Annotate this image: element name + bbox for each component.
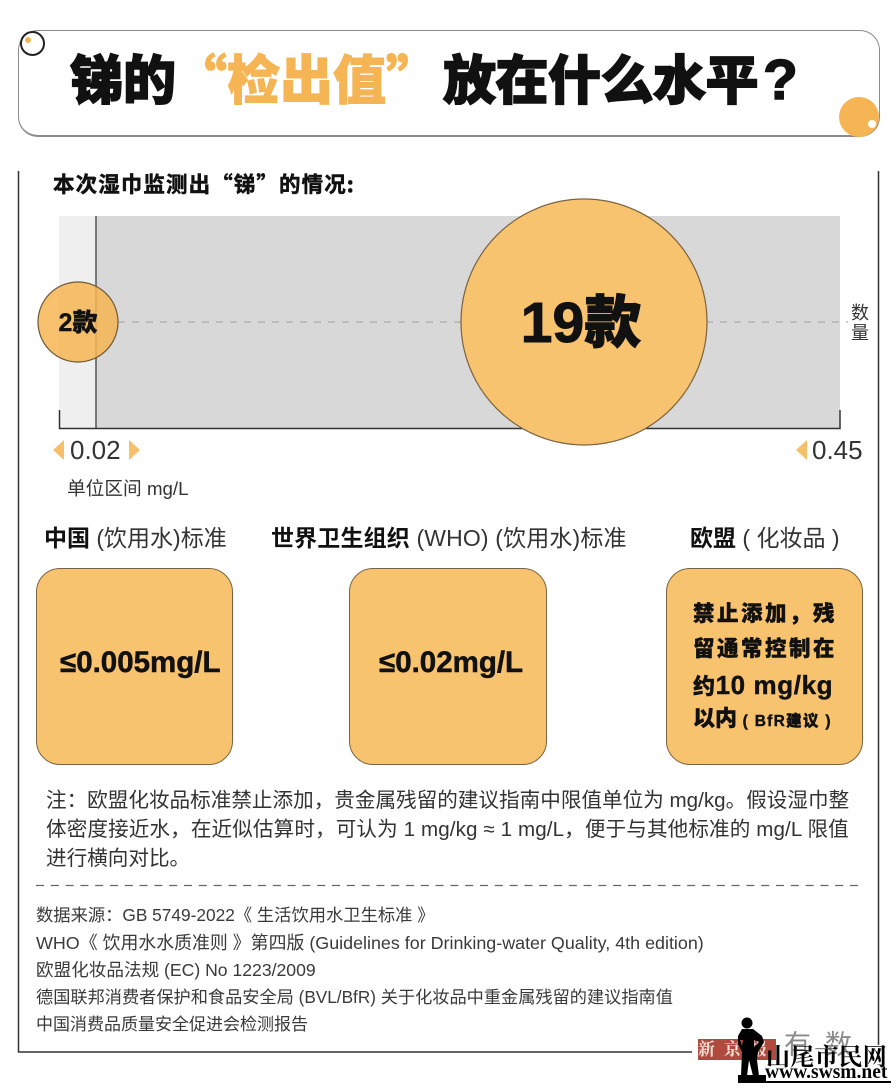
source 5: 中国消费品质量安全促进会检测报告 [36, 1015, 308, 1034]
chart band: below range [59, 216, 96, 428]
icon: white dot on yellow circle [868, 120, 876, 128]
unit label: 单位区间 mg/L [67, 478, 188, 499]
watermark calligraphy: 山尾市民网 [766, 1037, 887, 1072]
banner frame [18, 30, 880, 137]
card: EU limit [666, 568, 863, 765]
icon: small yellow dot [25, 37, 31, 43]
title text: at what level: 放在什么水平? [443, 39, 797, 115]
logo grey text: 有 数 [784, 1030, 852, 1060]
WHO value: ≤0.02mg/L [379, 646, 523, 679]
source 1: 数据来源：GB 5749-2022《 生活饮用水卫生标准 》 [36, 905, 435, 925]
EU text [693, 602, 837, 731]
EU line 3: 约10 mg/kg [693, 670, 833, 700]
source 2: WHO《 饮用水水质准则 》第四版 (Guidelines for Drinking-water Quality, 4th edition) [36, 933, 704, 953]
bubble: 2 products: 2款 [59, 309, 97, 337]
watermark baseline [738, 1081, 891, 1083]
bubble: 19 products: 19款 [521, 291, 641, 355]
note line 3: 进行横向对比。 [46, 847, 190, 870]
watermark figure silhouette [738, 1018, 766, 1081]
chart band: detected range [96, 216, 840, 428]
source 4: 德国联邦消费者保护和食品安全局 (BVL/BfR) 关于化妆品中重金属残留的建议指南值 [36, 987, 673, 1007]
heading: WHO standard: 世界卫生组织 (WHO) (饮用水)标准 [271, 525, 627, 551]
bubble chart [37, 198, 848, 446]
icon: yellow circle bottom right [839, 97, 879, 137]
axis value 0.45 with arrow [796, 435, 863, 465]
title banner [18, 30, 880, 137]
arrow left [796, 440, 807, 460]
EU line 1: 禁止添加，残 [693, 602, 837, 626]
axis value 0.02 with arrows [53, 435, 140, 465]
EU line 4: 以内 ( BfR建议 ) [693, 706, 832, 731]
bubble: 19 products [461, 199, 707, 445]
watermark url: www.swsm.net [765, 1062, 887, 1083]
arrow right [129, 440, 140, 460]
card: China limit [36, 568, 233, 765]
watermark [738, 1018, 891, 1083]
card: WHO limit [349, 568, 547, 765]
China value: ≤0.005mg/L [60, 646, 220, 679]
bubble: 2 products [38, 282, 118, 362]
axis label: quantity: 数量 [851, 303, 869, 343]
brand logo [698, 1030, 852, 1060]
heading: EU standard: 欧盟 ( 化妆品 ) [690, 525, 840, 551]
icon: outline circle top left [20, 31, 45, 56]
value: 0.02 [70, 435, 121, 465]
note line 1: 注：欧盟化妆品标准禁止添加，贵金属残留的建议指南中限值单位为 mg/kg。假设湿巾整 [46, 789, 849, 812]
heading: China standard: 中国 (饮用水)标准 [44, 525, 227, 551]
note text [46, 789, 849, 870]
title text: antimony: 锑的 [70, 39, 176, 115]
data sources [36, 905, 704, 1034]
EU line 2: 留通常控制在 [693, 637, 837, 661]
section heading: 本次湿巾监测出“锑”的情况: [53, 168, 355, 199]
source 3: 欧盟化妆品法规 (EC) No 1223/2009 [36, 960, 316, 980]
title text: detection value: “检出值” [174, 39, 439, 115]
arrow left [53, 440, 64, 460]
logo red block: 新京报 [698, 1040, 776, 1059]
note line 2: 体密度接近水，在近似估算时，可认为 1 mg/kg ≈ 1 mg/L，便于与其他标准的 mg/L 限值 [46, 818, 849, 841]
value: 0.45 [812, 435, 863, 465]
